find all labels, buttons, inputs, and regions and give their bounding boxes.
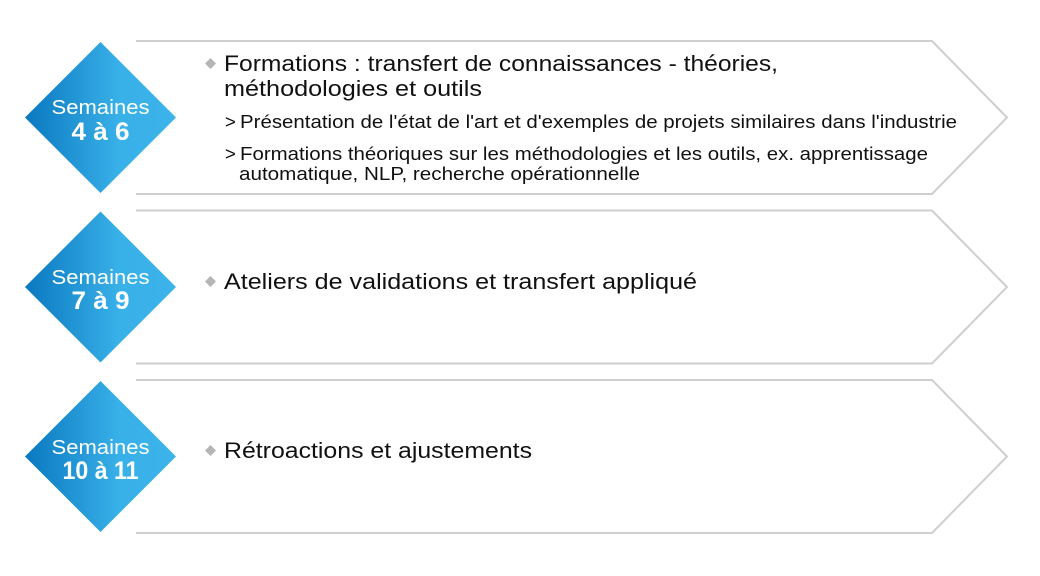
panel: weeks 7 to 9 [25, 210, 1007, 364]
sub-item: theoretical training: > [225, 143, 236, 164]
arrow outline: weeks 10 to 11 [136, 380, 1007, 533]
arrow outline: weeks 7 to 9 [136, 210, 1007, 364]
heading: feedback: Rétroactions et ajustements [224, 438, 532, 463]
diamond badge: weeks 7 to 9: Semaines [52, 266, 150, 289]
diamond badge: weeks 7 to 9: 7 à 9 [72, 287, 130, 315]
diamond badge: weeks 4 to 6: Semaines [52, 96, 150, 119]
bullet icon [205, 445, 216, 456]
sub-item: theoretical training: Formations théoriques sur les méthodologies et les outils, ex. apprentissage [240, 143, 928, 164]
sub-item: state of the art: Présentation de l'état de l'art et d'exemples de projets similaires dans l'industrie [240, 111, 957, 132]
panel: weeks 10 to 11 [25, 380, 1007, 533]
diamond badge: weeks 10 to 11: Semaines [52, 436, 150, 459]
diamond badge: weeks 4 to 6 [25, 42, 176, 193]
bullet icon [205, 276, 216, 287]
arrow outline: weeks 4 to 6 [136, 41, 1007, 194]
sub-item: state of the art: > [225, 111, 236, 132]
bullet icon [205, 58, 216, 69]
heading: formations: Formations : transfert de connaissances - théories, [224, 51, 778, 76]
heading: workshops: Ateliers de validations et transfert appliqué [224, 269, 697, 294]
diamond badge: weeks 4 to 6: 4 à 6 [72, 118, 130, 146]
sub-item: theoretical training: automatique, NLP, recherche opérationnelle [239, 163, 640, 184]
diamond badge: weeks 10 to 11: 10 à 11 [62, 457, 139, 485]
panel: weeks 4 to 6 [25, 41, 1007, 194]
diamond badge: weeks 7 to 9 [25, 212, 176, 362]
heading: formations: méthodologies et outils [224, 76, 482, 101]
diamond badge: weeks 10 to 11 [25, 381, 176, 532]
